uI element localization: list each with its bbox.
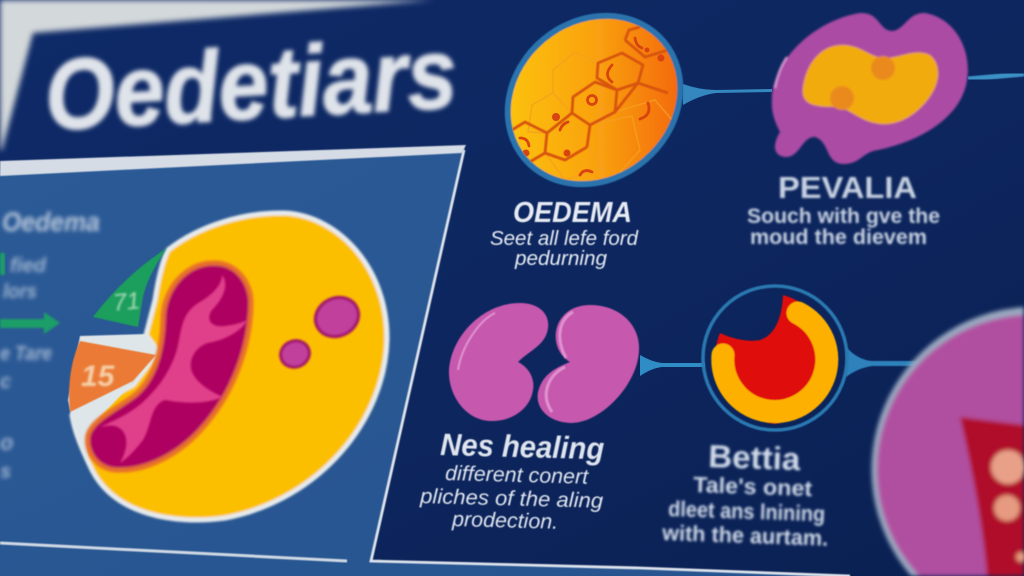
side text: lors bbox=[3, 281, 37, 303]
label: bettia: dleet ans lnining bbox=[668, 496, 826, 526]
connector middle left bbox=[640, 355, 705, 376]
chart: pie wedges: 15 bbox=[81, 360, 116, 393]
panel bottom line bbox=[0, 543, 347, 561]
chart: pie wedges: 71 bbox=[112, 287, 141, 317]
side text: e Tare bbox=[0, 343, 52, 365]
label: pevalia: PEVALIA bbox=[778, 170, 917, 205]
icon: honeycomb cell bbox=[504, 12, 684, 188]
green mark bbox=[0, 253, 5, 275]
label: nes healing bbox=[419, 427, 605, 534]
label: nes healing: Nes healing bbox=[440, 427, 605, 466]
label: pevalia bbox=[747, 170, 940, 249]
connector top bbox=[683, 84, 772, 105]
side text: s bbox=[0, 461, 11, 483]
label: bettia: Bettia bbox=[708, 438, 801, 477]
blob nucleus bbox=[803, 45, 938, 124]
blob highlight bbox=[775, 57, 787, 88]
label: nes healing: different conert bbox=[445, 462, 590, 489]
spot large bbox=[309, 290, 365, 344]
title: Oedetiars bbox=[42, 17, 460, 152]
label: bettia: with the aurtam. bbox=[661, 520, 829, 551]
label: oedema bbox=[490, 197, 639, 270]
organ: magenta bbox=[87, 263, 251, 470]
icon: large cell closeup bbox=[872, 307, 1024, 576]
green arrow bbox=[0, 312, 60, 334]
icon: red crescent bbox=[703, 286, 847, 430]
connector right bbox=[968, 74, 1024, 79]
page corner bbox=[0, 0, 433, 150]
label: oedema: pedurning bbox=[514, 248, 607, 270]
panel top border bbox=[0, 145, 466, 176]
connector middle right bbox=[846, 347, 925, 377]
label: pevalia: moud the dievem bbox=[750, 226, 927, 249]
spot small bbox=[277, 337, 313, 371]
label: oedema: OEDEMA bbox=[513, 197, 632, 229]
side text bbox=[0, 255, 52, 483]
label: bettia: Tale's onet bbox=[693, 472, 813, 501]
white wedge backing bbox=[68, 334, 160, 465]
label: pevalia: Souch with gve the bbox=[747, 205, 940, 228]
label: oedema: Seet all lefe ford bbox=[490, 228, 639, 250]
label: nes healing: prodection. bbox=[451, 508, 558, 534]
chart: pie wedges bbox=[69, 248, 167, 412]
side text: c bbox=[0, 371, 11, 393]
icon: purple blob bbox=[772, 13, 968, 164]
organ veins bbox=[100, 275, 248, 463]
side text: o bbox=[0, 430, 13, 455]
panel: main diagram bbox=[0, 145, 850, 576]
yellow cell bbox=[72, 213, 387, 520]
icon: kidneys bbox=[449, 303, 639, 423]
panel right and bottom border bbox=[371, 150, 850, 576]
panel heading: Oedema bbox=[2, 207, 100, 237]
side text: fied bbox=[10, 255, 47, 277]
label: bettia bbox=[661, 438, 829, 551]
label: nes healing: pliches of the aling bbox=[419, 485, 604, 513]
